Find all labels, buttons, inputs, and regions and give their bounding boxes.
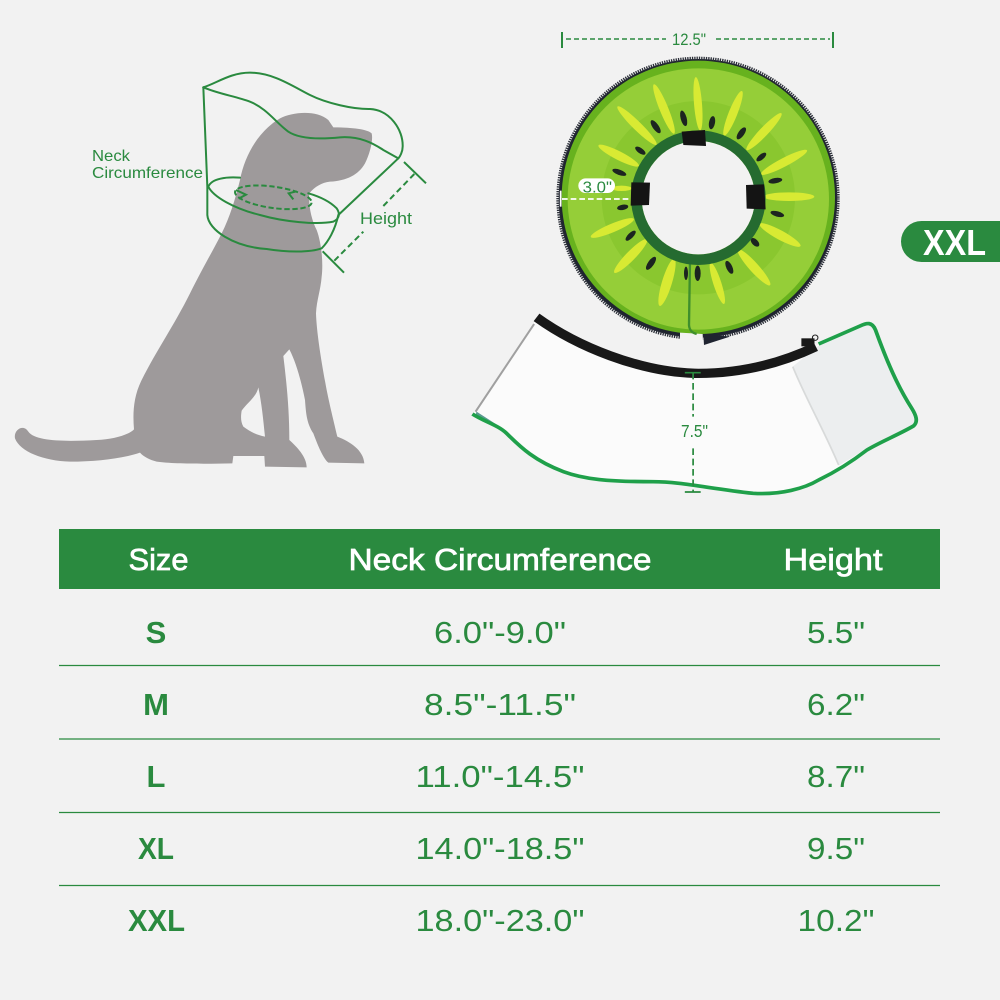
folded panel — [793, 325, 914, 466]
size table — [59, 529, 940, 938]
3.0 dimension — [561, 178, 629, 207]
kiwi fabric rings — [562, 61, 835, 334]
seam and gap — [680, 333, 703, 348]
black zipper strip — [537, 317, 816, 373]
row XL — [138, 831, 865, 866]
row dividers — [59, 666, 940, 886]
row L: L — [147, 759, 165, 794]
unrolled cone sheet — [472, 317, 916, 494]
7.5 dimension — [685, 373, 701, 492]
row L: 8.7" — [807, 759, 865, 794]
row XL: 14.0"-18.5" — [416, 831, 584, 866]
green piping — [472, 324, 916, 494]
7.5 label: 7.5" — [681, 421, 708, 441]
dog diagram — [15, 73, 426, 467]
height dimension — [323, 162, 426, 273]
row L — [147, 759, 865, 794]
neck circumference label: Neck — [92, 148, 131, 165]
height label: Height — [360, 209, 412, 228]
dog silhouette — [15, 113, 372, 467]
XXL size badge — [901, 221, 1000, 263]
kiwi cone collar — [558, 58, 838, 348]
row S: 5.5" — [807, 615, 865, 650]
row M: M — [143, 687, 169, 722]
row XXL — [128, 903, 874, 938]
row M: 6.2" — [807, 687, 865, 722]
row XXL: 10.2" — [798, 903, 874, 938]
sheet body — [472, 320, 916, 494]
table header: Height — [784, 542, 883, 577]
row XL: 9.5" — [807, 831, 865, 866]
velcro tabs — [631, 130, 766, 209]
row M — [143, 687, 865, 722]
row XXL: XXL — [128, 903, 185, 938]
width dimension 12.5 — [562, 30, 833, 49]
row S — [146, 615, 865, 650]
neck circumference label — [92, 148, 203, 182]
neck circumference label: Circumference — [92, 165, 203, 182]
seeds — [612, 110, 785, 281]
table header: Neck Circumference — [348, 542, 652, 577]
neck measuring dashed ring — [234, 181, 313, 213]
neck opening ring — [636, 136, 760, 260]
row XXL: 18.0"-23.0" — [416, 903, 584, 938]
3.0 dimension: 3.0" — [583, 179, 612, 196]
row S: 6.0"-9.0" — [434, 615, 566, 650]
row XL: XL — [138, 831, 174, 866]
grey side edge — [476, 324, 534, 412]
zipper pull — [801, 335, 818, 346]
row S: S — [146, 615, 166, 650]
rays — [589, 77, 814, 307]
table header — [59, 529, 940, 589]
cone outline — [203, 73, 403, 252]
row M: 8.5"-11.5" — [424, 687, 576, 722]
XXL size badge: XXL — [923, 222, 986, 263]
row L: 11.0"-14.5" — [416, 759, 584, 794]
zipper edge — [559, 59, 837, 338]
table header: Size — [128, 542, 188, 577]
width dimension 12.5: 12.5" — [672, 30, 706, 49]
